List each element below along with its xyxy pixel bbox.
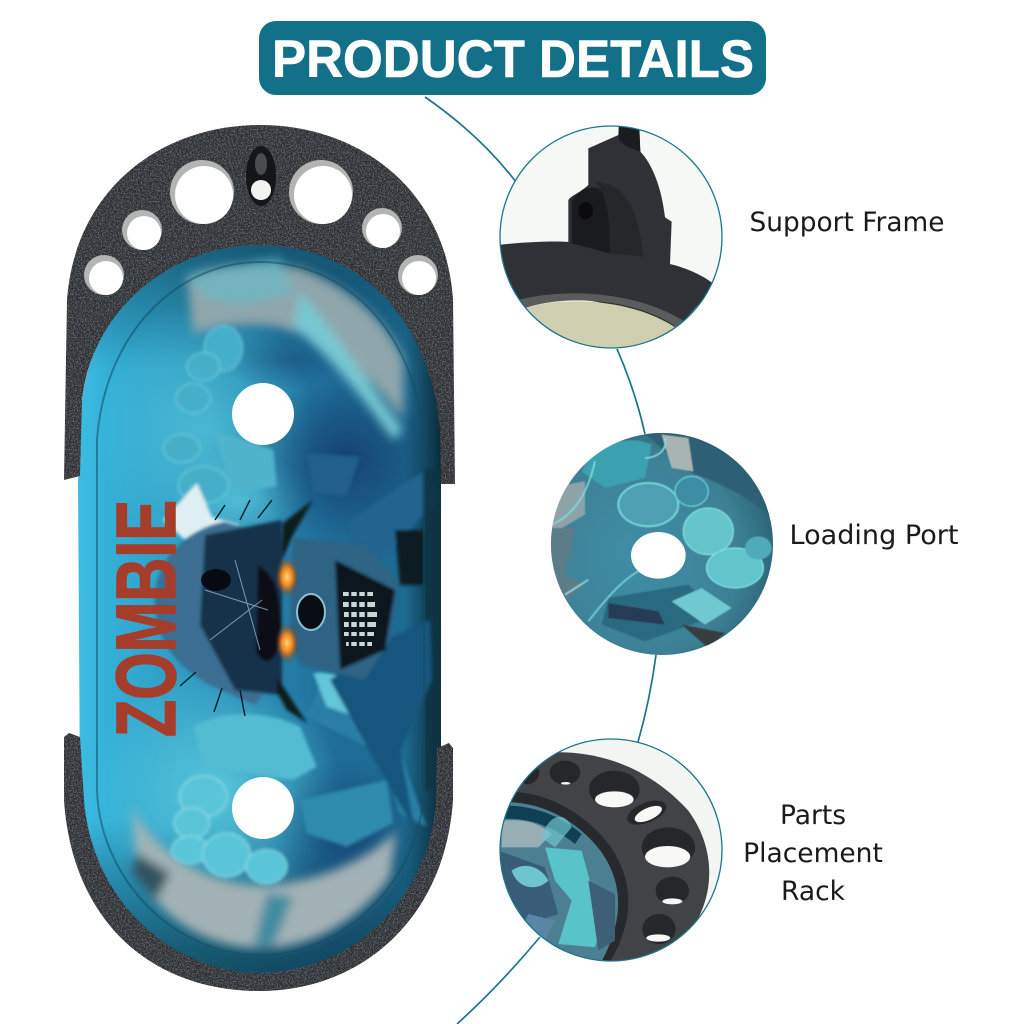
- skull artwork: [155, 500, 398, 723]
- label: parts placement rack: Rack: [781, 876, 846, 907]
- printed word: ZOMBIE: [99, 500, 193, 737]
- label: loading port: Loading Port: [790, 520, 958, 551]
- detail circle: support frame: [495, 120, 722, 360]
- cyan figures bottom: [171, 672, 427, 884]
- teeth: [343, 592, 377, 646]
- inner tray line: [97, 262, 424, 955]
- dark frame bottom: [64, 733, 453, 991]
- cyan figures top: [163, 326, 360, 503]
- white loading holes: [232, 383, 294, 445]
- detail circle: parts placement rack: [495, 739, 722, 971]
- detail circle: loading port: [545, 428, 782, 655]
- product: tray: [64, 120, 958, 991]
- pale star: [163, 483, 240, 545]
- label: parts placement rack: Placement: [743, 838, 883, 869]
- rack holes: [84, 146, 438, 295]
- title banner: PRODUCT DETAILS: [272, 30, 754, 89]
- printed panel: [70, 240, 450, 980]
- label: parts placement rack: Parts: [780, 800, 846, 831]
- label: support frame: Support Frame: [750, 207, 944, 238]
- connector lines: [425, 97, 656, 1024]
- dark frame top: [64, 125, 455, 484]
- top pale area: [187, 257, 403, 440]
- bottom pale area: [132, 807, 397, 948]
